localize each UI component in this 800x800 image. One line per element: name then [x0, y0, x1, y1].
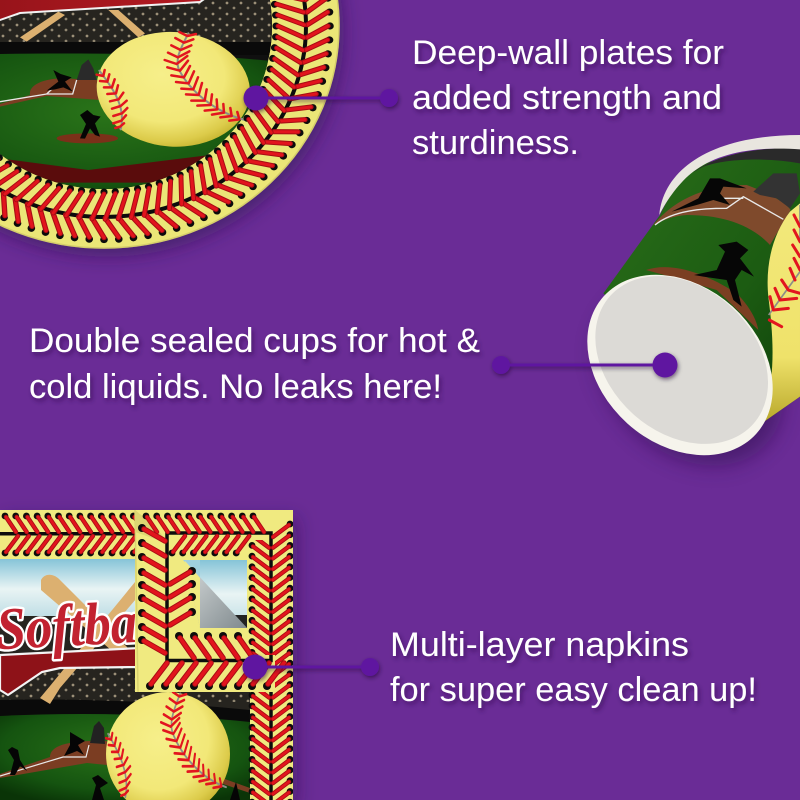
cup rim [659, 135, 800, 215]
plate softball [93, 27, 254, 152]
napkin bats [41, 574, 128, 648]
napkin fold corner [135, 510, 167, 543]
napkin shape shadow [0, 510, 293, 800]
text: cup caption: cold liquids. No leaks here! [29, 368, 442, 406]
napkin silhouettes [64, 732, 85, 756]
napkin banner [0, 648, 140, 695]
napkin folded layer [135, 510, 293, 800]
callout connector: cups [492, 352, 678, 378]
napkin fold stitching [143, 513, 232, 532]
napkin softball [106, 692, 230, 800]
text: plate caption [412, 34, 724, 162]
napkin seams [167, 533, 271, 660]
cup wall [603, 156, 800, 423]
text: cup caption: Double sealed cups for hot & [29, 322, 480, 360]
panel: paper cup [587, 135, 800, 473]
cup shadow [561, 247, 800, 503]
napkin window [200, 560, 247, 628]
cup silhouettes [672, 178, 747, 212]
cup basepath [653, 185, 791, 245]
text: plate caption: sturdiness. [412, 124, 579, 162]
text: plate caption: Deep-wall plates for [412, 34, 724, 72]
cup softball stitching [769, 205, 800, 315]
text: plate caption: added strength and [412, 79, 722, 117]
text: napkin caption: for super easy clean up! [390, 671, 757, 709]
callout connector: napkins [242, 654, 379, 680]
text: napkin caption [390, 626, 757, 709]
cup inner dark band [693, 148, 800, 173]
text: cup caption [29, 322, 480, 406]
plate rim [0, 0, 339, 248]
napkin top stitching [0, 512, 135, 556]
plate stitching [0, 0, 385, 291]
text: napkin caption: Multi-layer napkins [390, 626, 689, 664]
cup base rim [587, 274, 773, 456]
napkin printed scene [0, 559, 250, 800]
callout connector: plates [244, 86, 398, 110]
cup mound [646, 267, 758, 330]
plate centre scene [0, 0, 280, 200]
panel: softball plate [0, 0, 352, 266]
cup softball [762, 203, 800, 423]
panel: napkin [0, 510, 293, 800]
cup base [595, 276, 768, 444]
